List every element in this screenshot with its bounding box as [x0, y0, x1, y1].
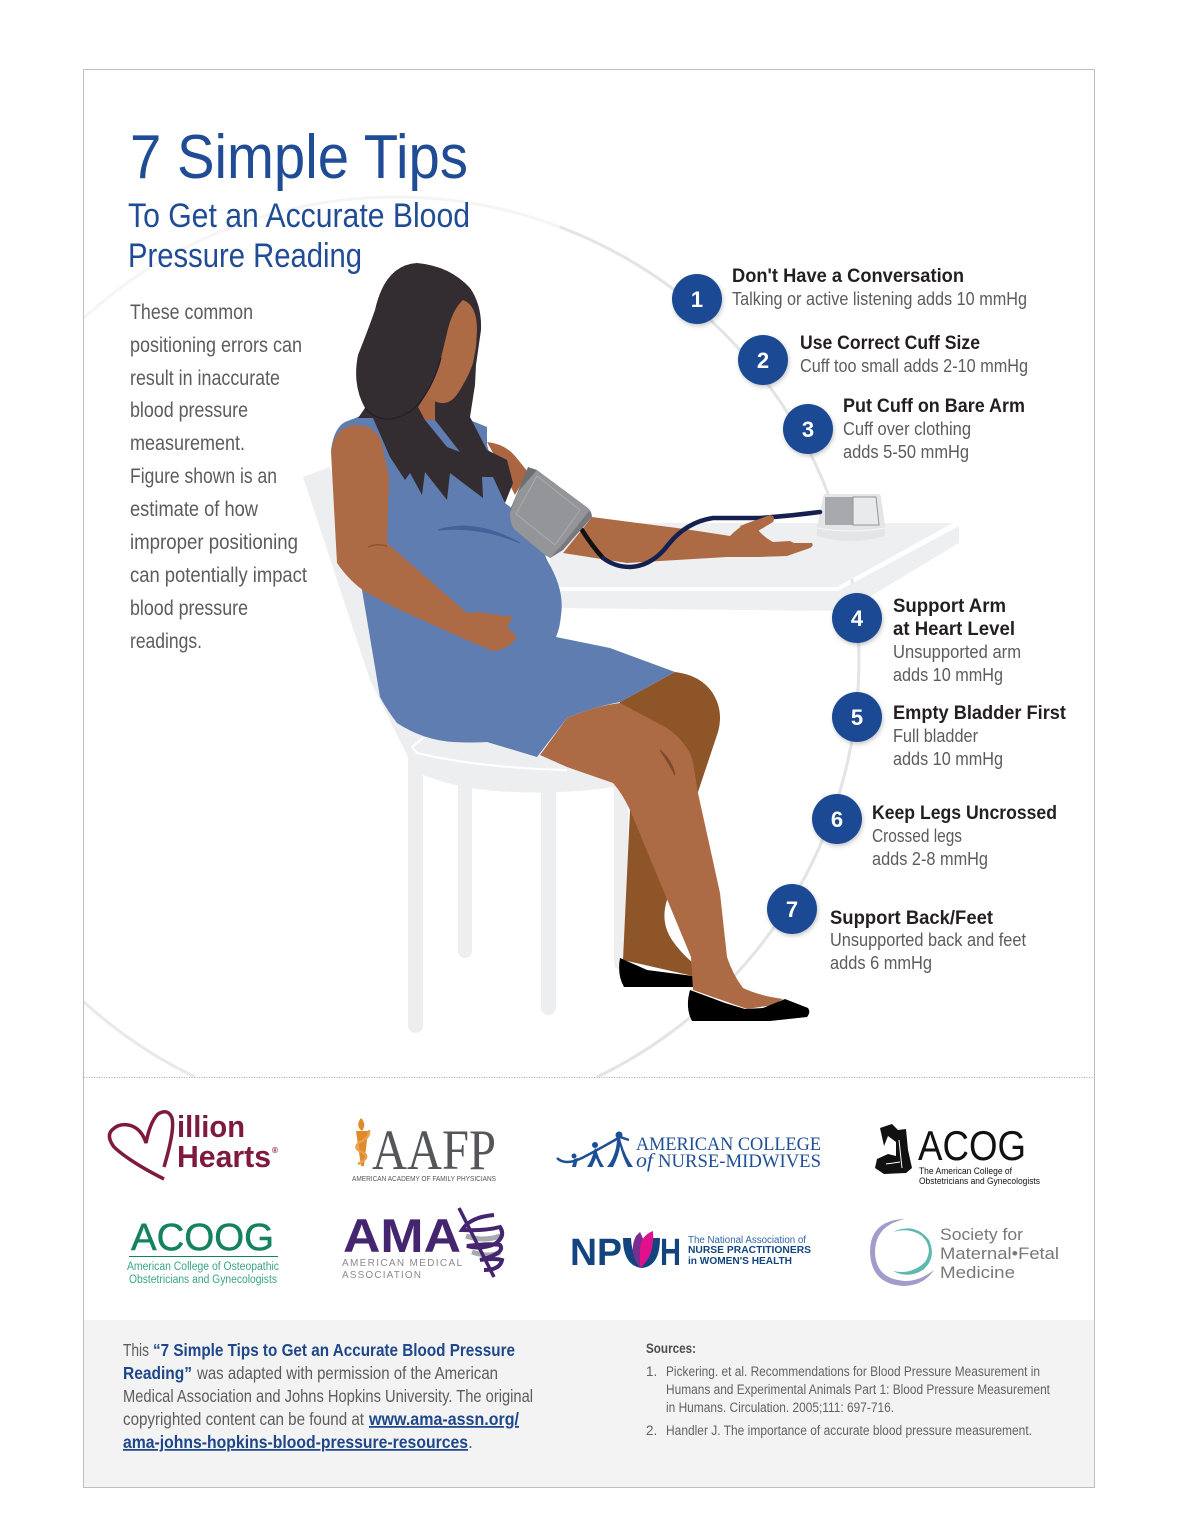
attribution text: was adapted with permission of the American [196, 1363, 498, 1383]
back shoe [619, 958, 693, 987]
tip 6 [812, 794, 1057, 869]
dress [331, 405, 675, 757]
tip 1: 1 [691, 287, 703, 312]
logo: Society for Maternal-Fetal Medicine: Medicine [940, 1263, 1015, 1282]
tip 5 [832, 692, 1066, 769]
logo: American College of Nurse-Midwives: NURSE-MIDWIVES [658, 1151, 821, 1172]
sources list: 1. [646, 1364, 657, 1379]
infographic [83, 69, 1095, 1488]
sources list: Handler J. The importance of accurate blood pressure measurement. [666, 1423, 1032, 1438]
tip 2: 2 [757, 348, 769, 373]
tip 5: adds 10 mmHg [893, 749, 1003, 769]
tip 6: Keep Legs Uncrossed [872, 802, 1057, 824]
sources list: Humans and Experimental Animals Part 1: Blood Pressure Measurement [666, 1382, 1050, 1397]
tip 7: Support Back/Feet [830, 907, 993, 929]
neck [418, 393, 435, 420]
belly crease [438, 526, 520, 543]
logo: AAFP: AAFP [372, 1119, 496, 1182]
intro paragraph: readings. [130, 630, 202, 653]
logo: Million Hearts: Hearts [177, 1139, 271, 1174]
dress neckline [425, 420, 460, 452]
tip 5: Empty Bladder First [893, 702, 1066, 724]
tip 4: at Heart Level [893, 618, 1015, 640]
attribution text: www.ama-assn.org/ [368, 1409, 519, 1429]
logo: ACOOG: Obstetricians and Gynecologists [129, 1274, 277, 1286]
tip 3 [783, 395, 1025, 462]
intro paragraph: blood pressure [130, 399, 248, 422]
intro paragraph: Figure shown is an [130, 465, 277, 488]
tip 4: adds 10 mmHg [893, 665, 1003, 685]
logo: NPWH: NP [570, 1232, 622, 1274]
page frame [84, 70, 1094, 1488]
tip 4: 4 [851, 606, 864, 631]
face [427, 300, 477, 403]
tip 6: 6 [831, 807, 843, 832]
logo: Million Hearts: illion [177, 1109, 245, 1144]
attribution text [123, 1340, 533, 1452]
large circle arc [84, 196, 860, 1077]
logo: ACOOG: ACOOG [131, 1217, 274, 1259]
tip 6: adds 2-8 mmHg [872, 849, 988, 869]
tip 4: Support Arm [893, 595, 1006, 617]
tip 2 [738, 332, 1028, 385]
attribution text: Medical Association and Johns Hopkins University. The original [123, 1386, 533, 1406]
tip 7: 7 [786, 897, 798, 922]
subtitle [128, 197, 470, 275]
sources background panel [84, 1320, 1094, 1487]
attribution text: Reading” [123, 1363, 192, 1383]
logo: ACOG: Obstetricians and Gynecologists [919, 1176, 1040, 1186]
logo: AAFP: AMERICAN ACADEMY OF FAMILY PHYSICIANS [352, 1176, 496, 1183]
subtitle: Pressure Reading [128, 237, 362, 275]
title: 7 Simple Tips [130, 123, 468, 192]
sources list: Pickering. et al. Recommendations for Blood Pressure Measurement in [666, 1364, 1040, 1379]
logo: NPWH [570, 1231, 811, 1274]
logo: Million Hearts [109, 1109, 278, 1179]
front shoe [688, 990, 809, 1021]
logo: American College of Nurse-Midwives: AMERICAN COLLEGE [636, 1134, 821, 1155]
tip 6: Crossed legs [872, 826, 962, 846]
logo: Society for Maternal-Fetal Medicine [870, 1219, 1059, 1286]
chair [303, 467, 628, 1033]
intro paragraph: positioning errors can [130, 334, 302, 357]
back arm [487, 442, 528, 495]
attribution text: “7 Simple Tips to Get an Accurate Blood Pressure [153, 1340, 515, 1360]
intro paragraph: These common [130, 301, 253, 324]
tip 7: adds 6 mmHg [830, 953, 932, 973]
intro paragraph: can potentially impact [130, 564, 307, 587]
tip 7: Unsupported back and feet [830, 930, 1026, 950]
hair outline [365, 358, 441, 419]
sources list: 2. [646, 1423, 657, 1438]
intro paragraph: result in inaccurate [130, 367, 280, 390]
subtitle: To Get an Accurate Blood [128, 197, 470, 235]
tip 3: 3 [802, 417, 814, 442]
attribution text: This [123, 1340, 149, 1360]
logo: ACOG: The American College of [919, 1166, 1012, 1176]
sources list: Sources: [646, 1340, 696, 1356]
logo: NPWH: The National Association of [688, 1235, 806, 1246]
tip 3: adds 5-50 mmHg [843, 442, 969, 462]
intro paragraph [130, 301, 307, 653]
intro paragraph: estimate of how [130, 498, 259, 521]
near arm and hand [331, 425, 517, 651]
logo: AMA: ASSOCIATION [342, 1270, 421, 1281]
tip 5: Full bladder [893, 726, 978, 746]
thumb [740, 515, 774, 535]
blood pressure monitor [817, 494, 885, 541]
tip 4: Unsupported arm [893, 642, 1021, 662]
attribution text: . [468, 1432, 473, 1452]
logo: ACOOG [127, 1217, 279, 1286]
tip 7 [767, 884, 1026, 973]
tip 1 [672, 265, 1027, 324]
knee crease [660, 750, 675, 775]
logo: American College of Nurse-Midwives: of [636, 1150, 656, 1172]
logo: Society for Maternal-Fetal Medicine: Maternal•Fetal [940, 1244, 1059, 1263]
sources list: in Humans. Circulation. 2005;111: 697-716. [666, 1400, 894, 1415]
tip 1: Talking or active listening adds 10 mmHg [732, 289, 1027, 309]
logo: Society for Maternal-Fetal Medicine: Society for [940, 1225, 1023, 1244]
tip 4 [832, 593, 1021, 685]
illustration: woman seated with cuff [303, 263, 959, 1033]
logo: AMA: AMA [343, 1209, 461, 1262]
forearm and hand [563, 515, 813, 563]
tip 3: Cuff over clothing [843, 419, 971, 439]
logo: ACOOG: American College of Osteopathic [127, 1261, 279, 1273]
attribution text: copyrighted content can be found at [123, 1409, 364, 1429]
intro paragraph: improper positioning [130, 531, 298, 554]
intro paragraph: measurement. [130, 432, 245, 455]
logo: NPWH: in WOMEN'S HEALTH [688, 1256, 792, 1267]
table [550, 523, 959, 611]
back leg [620, 672, 720, 976]
tip 2: Use Correct Cuff Size [800, 332, 980, 354]
logo: AMA [342, 1208, 502, 1281]
logo: Million Hearts: ® [272, 1146, 278, 1155]
logo: ACOG: ACOG [918, 1122, 1026, 1169]
tip 5: 5 [851, 705, 863, 730]
cuff tube [582, 512, 820, 567]
hair [356, 263, 513, 503]
logo: NPWH: NURSE PRACTITIONERS [688, 1245, 811, 1256]
logo: American College of Nurse-Midwives [557, 1132, 821, 1172]
cuff [510, 467, 592, 558]
logo: ACOG [875, 1122, 1040, 1186]
tip 1: Don't Have a Conversation [732, 265, 964, 287]
sources list [646, 1340, 1050, 1438]
intro paragraph: blood pressure [130, 597, 248, 620]
logo: AMA: AMERICAN MEDICAL [342, 1258, 462, 1269]
attribution text: ama-johns-hopkins-blood-pressure-resources [123, 1432, 468, 1452]
tip 2: Cuff too small adds 2-10 mmHg [800, 356, 1028, 376]
front leg [540, 703, 783, 1009]
tip 3: Put Cuff on Bare Arm [843, 395, 1025, 417]
logo: NPWH: H [660, 1232, 681, 1274]
